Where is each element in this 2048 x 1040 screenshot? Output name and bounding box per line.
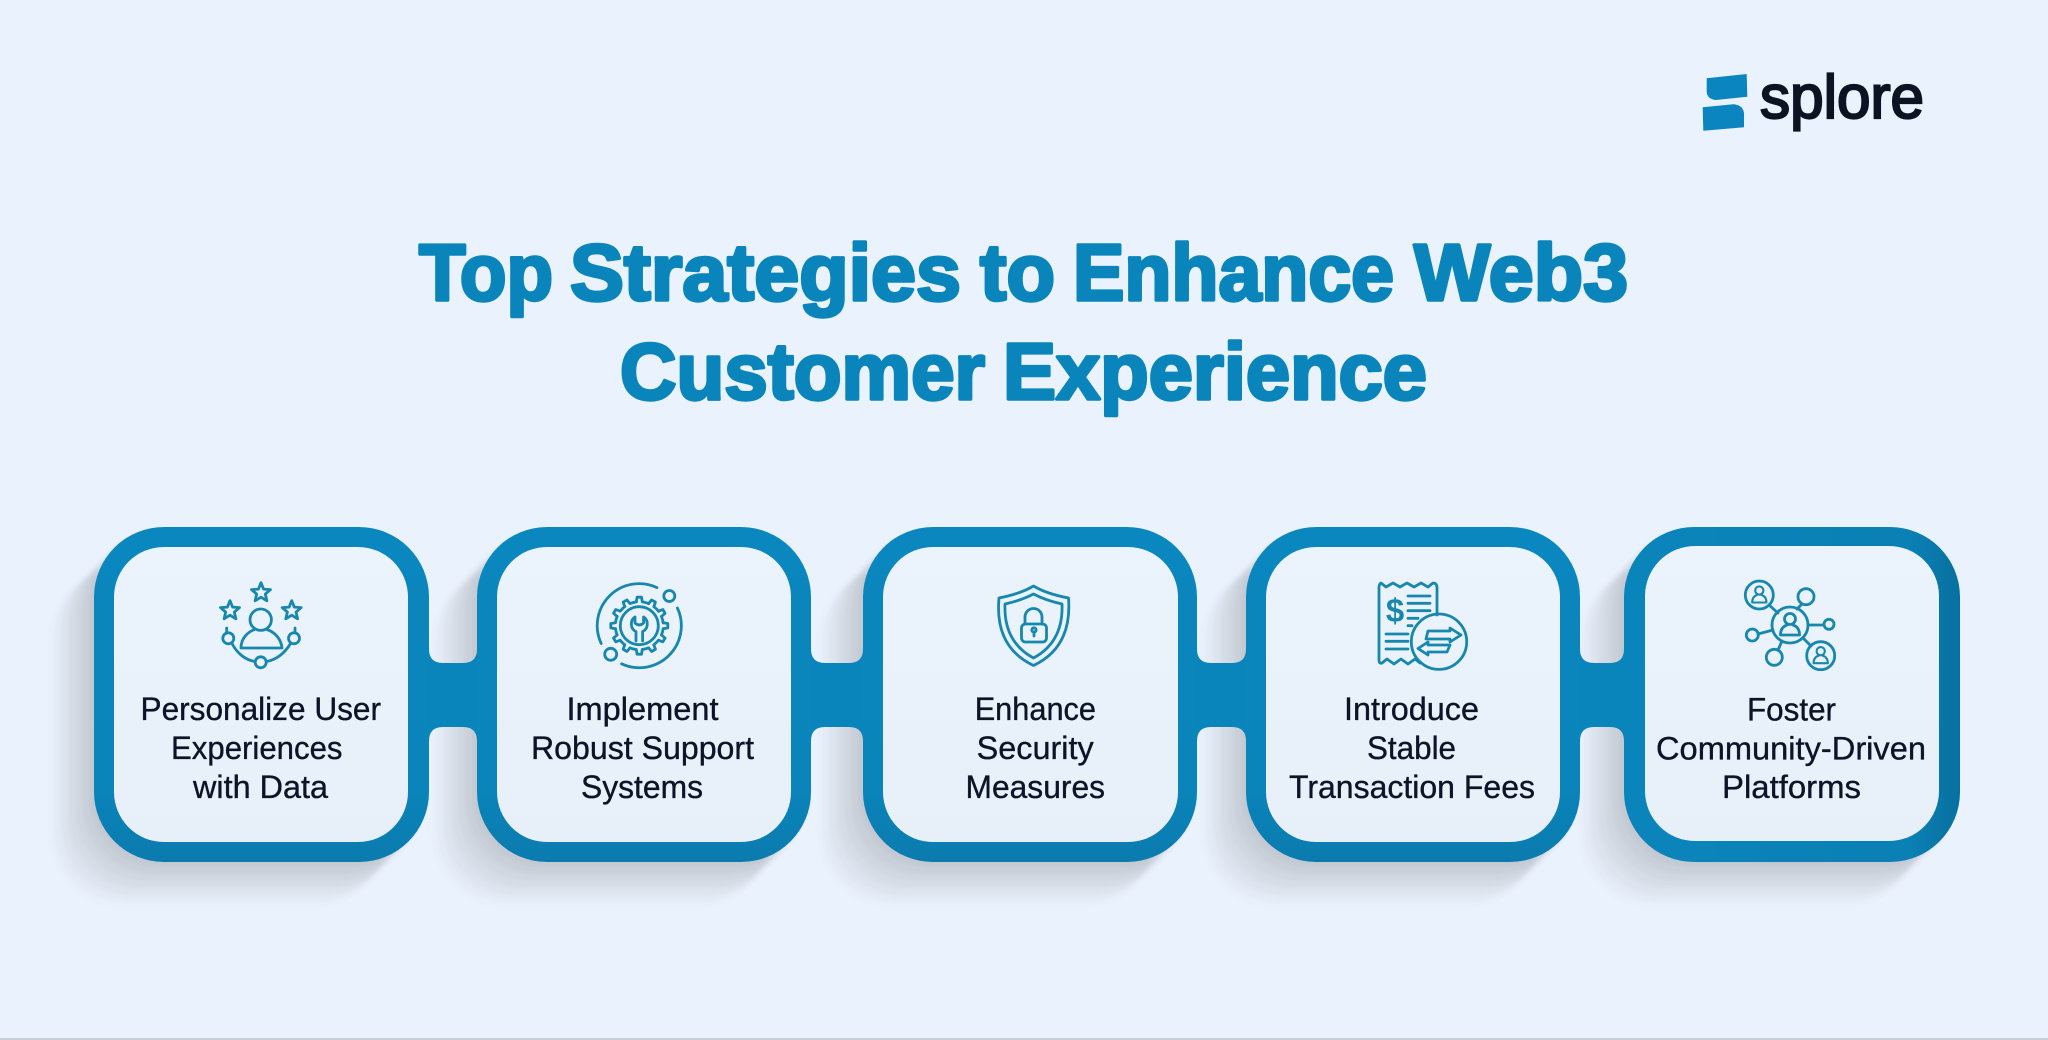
card label: [1289, 691, 1535, 805]
panel: Enhance Security Measures: [863, 527, 1197, 862]
title line 1: [419, 228, 1628, 317]
card inner: [883, 547, 1178, 842]
card inner: [1266, 547, 1560, 842]
icon: shield with lock: [999, 586, 1069, 666]
icon: receipt with exchange arrows: $: [1386, 592, 1404, 629]
icon: gear with wrench: [597, 584, 681, 668]
card label: Personalize User: [140, 691, 381, 727]
logo: splore: [1703, 63, 1924, 131]
card label: [966, 691, 1105, 805]
title line 1: Web3: [1414, 228, 1628, 317]
card label: Platforms: [1722, 769, 1861, 805]
card inner: [1645, 546, 1939, 841]
icon: receipt with exchange arrows: [1379, 583, 1467, 669]
title: [419, 228, 1628, 416]
card frame: [477, 527, 811, 862]
card inner: [114, 547, 408, 842]
connectors between cards: [419, 649, 1634, 741]
panel: Implement Robust Support Systems: [477, 527, 811, 862]
card label: Security: [977, 730, 1094, 766]
card frame: [1246, 527, 1580, 862]
logo mark: [1703, 74, 1747, 131]
logo wordmark: splore: [1760, 63, 1924, 131]
card label: Introduce: [1344, 691, 1479, 727]
card label: Enhance: [975, 691, 1096, 727]
card label: Experiences: [171, 730, 342, 766]
card frame: [863, 527, 1197, 862]
title line 1: to: [980, 228, 1055, 317]
title line 2: Experience: [1003, 327, 1427, 416]
title line 1: Enhance: [1073, 228, 1394, 317]
icon: community network: [1745, 581, 1835, 670]
card label: Stable: [1367, 730, 1456, 766]
card label: with Data: [192, 769, 328, 805]
card label: [140, 691, 381, 805]
title line 1: Strategies: [570, 228, 961, 317]
card frame: [1624, 527, 1960, 862]
card label: Implement: [566, 691, 719, 727]
bottom edge line: [0, 1038, 2048, 1040]
card label: Foster: [1747, 692, 1836, 728]
title line 1: Top: [419, 228, 553, 317]
card label: [531, 691, 754, 805]
title line 2: [620, 327, 1427, 416]
card label: Robust Support: [531, 730, 754, 766]
card inner: [497, 547, 791, 842]
panel: Foster Community-Driven Platforms: [1624, 527, 1960, 862]
card label: Measures: [966, 769, 1105, 805]
card frame: [94, 527, 429, 862]
panel: Personalize User Experiences with Data: [94, 527, 429, 862]
card label: Systems: [581, 769, 703, 805]
title line 2: Customer: [620, 327, 985, 416]
icon: person with stars: [220, 583, 301, 668]
panel: Introduce Stable Transaction Fees: [1246, 527, 1580, 862]
card label: Community-Driven: [1656, 730, 1926, 766]
card label: [1656, 692, 1926, 805]
card label: Transaction Fees: [1289, 769, 1535, 805]
long shadows under cards: [50, 529, 1957, 906]
